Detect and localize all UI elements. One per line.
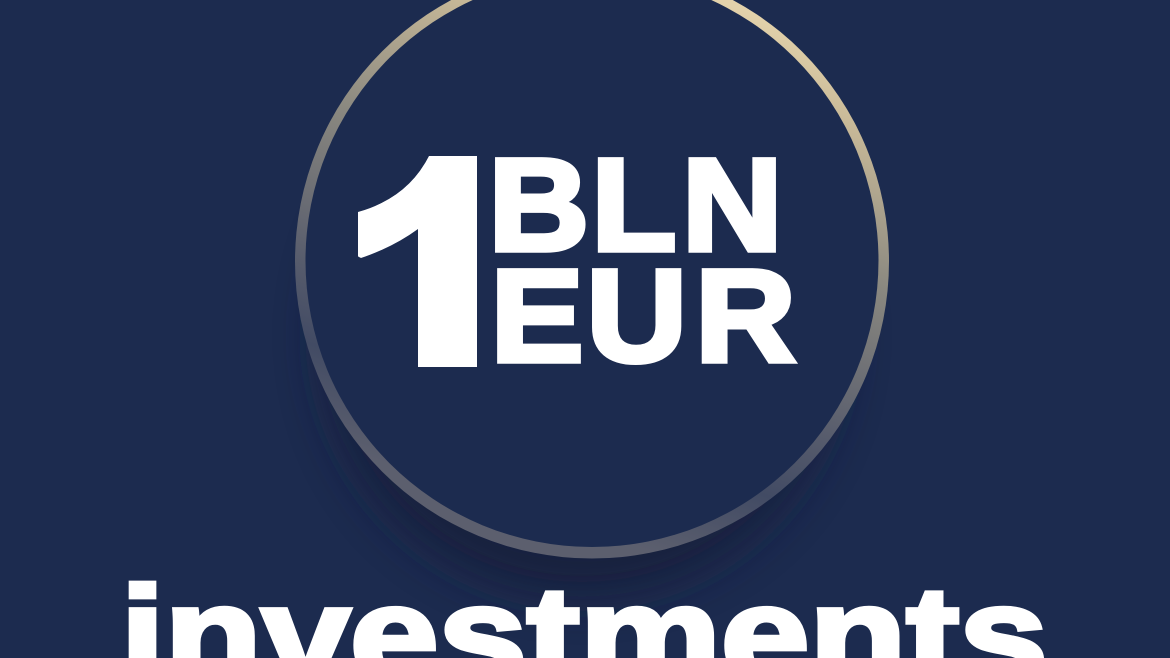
label: EUR: EUR bbox=[491, 243, 796, 389]
circle badge with gradient ring bbox=[295, 0, 889, 558]
numeral 1: 1 bbox=[356, 100, 517, 424]
infographic canvas bbox=[128, 0, 1044, 658]
drop shadow under circle bbox=[320, 73, 844, 597]
label: BLN: BLN bbox=[489, 132, 782, 278]
